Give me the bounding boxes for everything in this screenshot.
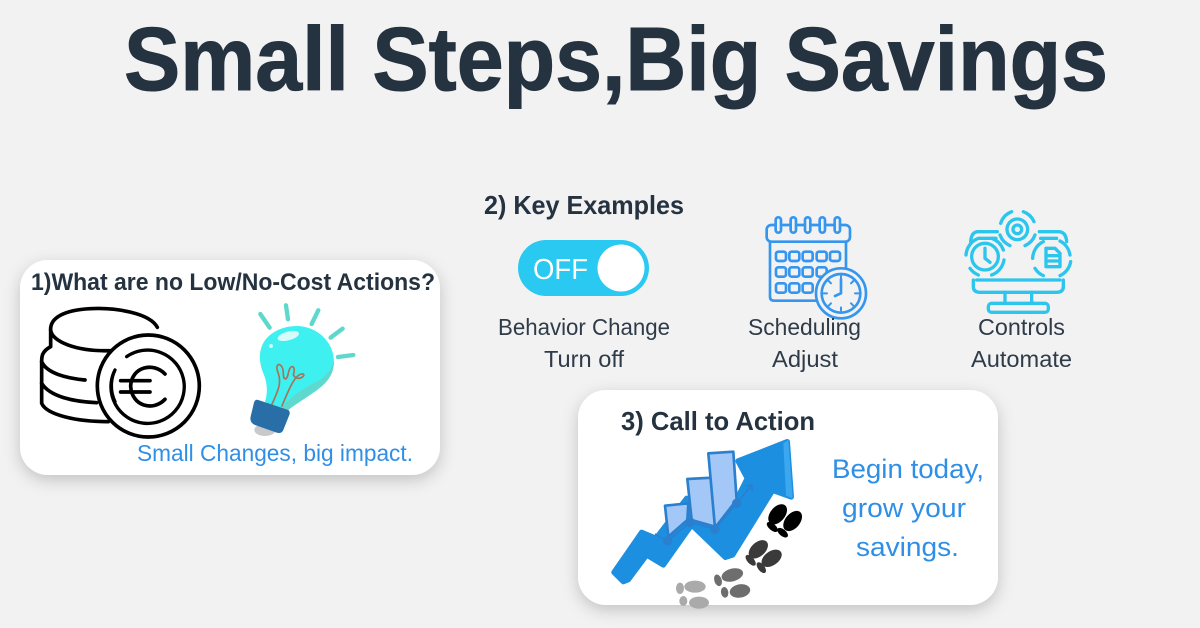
icon: footprints: [676, 501, 806, 609]
icon: light bulb: [250, 305, 353, 436]
label: behavior change: [498, 314, 670, 372]
panel 1 caption: Small Changes, big impact.: [137, 440, 413, 466]
panel 1 card: [20, 260, 440, 475]
label: scheduling: [748, 314, 861, 372]
label: behavior change: Turn off: [544, 346, 625, 372]
panel 1 heading: 1)What are no Low/No-Cost Actions?: [31, 269, 435, 296]
label: scheduling: Scheduling: [748, 314, 861, 340]
call to action text: grow your: [842, 493, 966, 523]
label: controls: [971, 314, 1072, 372]
panel 3 heading: 3) Call to Action: [621, 406, 815, 436]
call to action text: [832, 454, 984, 562]
label: behavior change: Behavior Change: [498, 314, 670, 340]
icon: off toggle: OFF: [533, 254, 588, 286]
panel: low/no-cost actions: [20, 260, 440, 475]
icon: calendar with clock: [767, 217, 866, 318]
title: Small Steps,Big Savings: [124, 10, 1108, 110]
call to action text: savings.: [856, 532, 959, 562]
icon: off toggle: [518, 240, 649, 296]
label: controls: Controls: [978, 314, 1065, 340]
label: scheduling: Adjust: [772, 346, 839, 372]
icon: euro coin stack: [42, 308, 199, 437]
icon: rising arrow chart: [614, 440, 793, 582]
section 2 heading: 2) Key Examples: [484, 190, 684, 220]
label: controls: Automate: [971, 346, 1072, 372]
call to action text: Begin today,: [832, 454, 984, 484]
icon: monitor with automation cycle: [966, 212, 1071, 312]
panel: call to action: [578, 390, 998, 609]
panel 3 card: [578, 390, 998, 605]
section: key examples: [484, 190, 1072, 372]
